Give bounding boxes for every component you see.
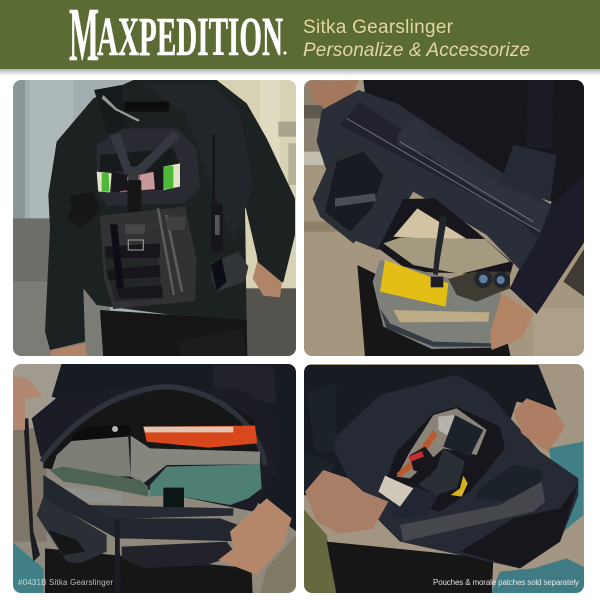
photo panel: open main compartment: [10, 362, 303, 595]
photo panel: organizer pocket with tourniquet: [300, 362, 590, 595]
header title: Sitka Gearslinger: [303, 17, 454, 38]
header shadow: [0, 69, 600, 76]
yellow box: [380, 260, 448, 307]
header banner: [0, 0, 600, 77]
logo: Maxpedition: AXPEDITION: [97, 6, 283, 67]
pants: [357, 265, 511, 357]
left hand: [13, 375, 42, 430]
zipper pull bar: [87, 505, 233, 519]
pocket opening: [380, 407, 505, 512]
logo: Maxpedition: [69, 0, 286, 77]
shirt: [45, 80, 295, 350]
buckle: [163, 488, 184, 508]
photo panel: front view with open pocket: [300, 78, 590, 358]
open pocket interior: [378, 198, 513, 275]
side pouch left: [67, 192, 100, 227]
caption: product name: #0431B Sitka Gearslinger: [18, 578, 113, 587]
shoulder strap: [94, 85, 124, 133]
right hand: [513, 398, 565, 452]
caption: disclaimer: Pouches & morale patches sold separately: [433, 578, 579, 587]
right hand: [218, 498, 292, 575]
hand: [490, 293, 533, 350]
ammo strip: [393, 310, 489, 322]
molle panel: [460, 483, 578, 568]
hands: [50, 262, 282, 358]
orange package: [143, 426, 257, 448]
left hand: [305, 470, 388, 534]
binoculars: [448, 272, 510, 302]
bag upper compartment: [97, 128, 200, 206]
radio: [212, 134, 215, 204]
lower flap: [373, 260, 508, 349]
tan liner: [383, 238, 510, 274]
rangefinder pouch: [211, 252, 248, 292]
bag back panel: [32, 385, 282, 512]
shirt: [52, 363, 297, 532]
grey mesh pockets: [52, 437, 131, 477]
pants: [45, 548, 253, 595]
top hand: [307, 80, 359, 111]
red tool: [410, 447, 437, 477]
pants: [327, 542, 493, 595]
zipper arc: [42, 387, 265, 465]
shirt: [303, 365, 557, 512]
organizer contents: [397, 408, 487, 478]
header subtitle: Personalize & Accessorize: [303, 40, 530, 61]
bag body: [330, 375, 578, 568]
shoulder pad: [501, 144, 557, 202]
yellow ring: [451, 476, 468, 497]
lower flap: [43, 475, 257, 542]
photo panel: back view of sling pack: [10, 78, 303, 358]
map: [393, 208, 466, 240]
elastic straps: [443, 415, 483, 457]
pants: [100, 310, 247, 358]
label roll: [378, 476, 413, 507]
bag lower compartment: [100, 207, 197, 309]
bag band: [317, 90, 552, 270]
strap: [433, 217, 447, 278]
patches: green and flag: [97, 172, 112, 192]
front pouch: [312, 169, 356, 244]
flap: [400, 482, 545, 542]
green rolls: [50, 467, 148, 497]
black card pouch: [72, 425, 132, 441]
shirt: [363, 80, 587, 314]
